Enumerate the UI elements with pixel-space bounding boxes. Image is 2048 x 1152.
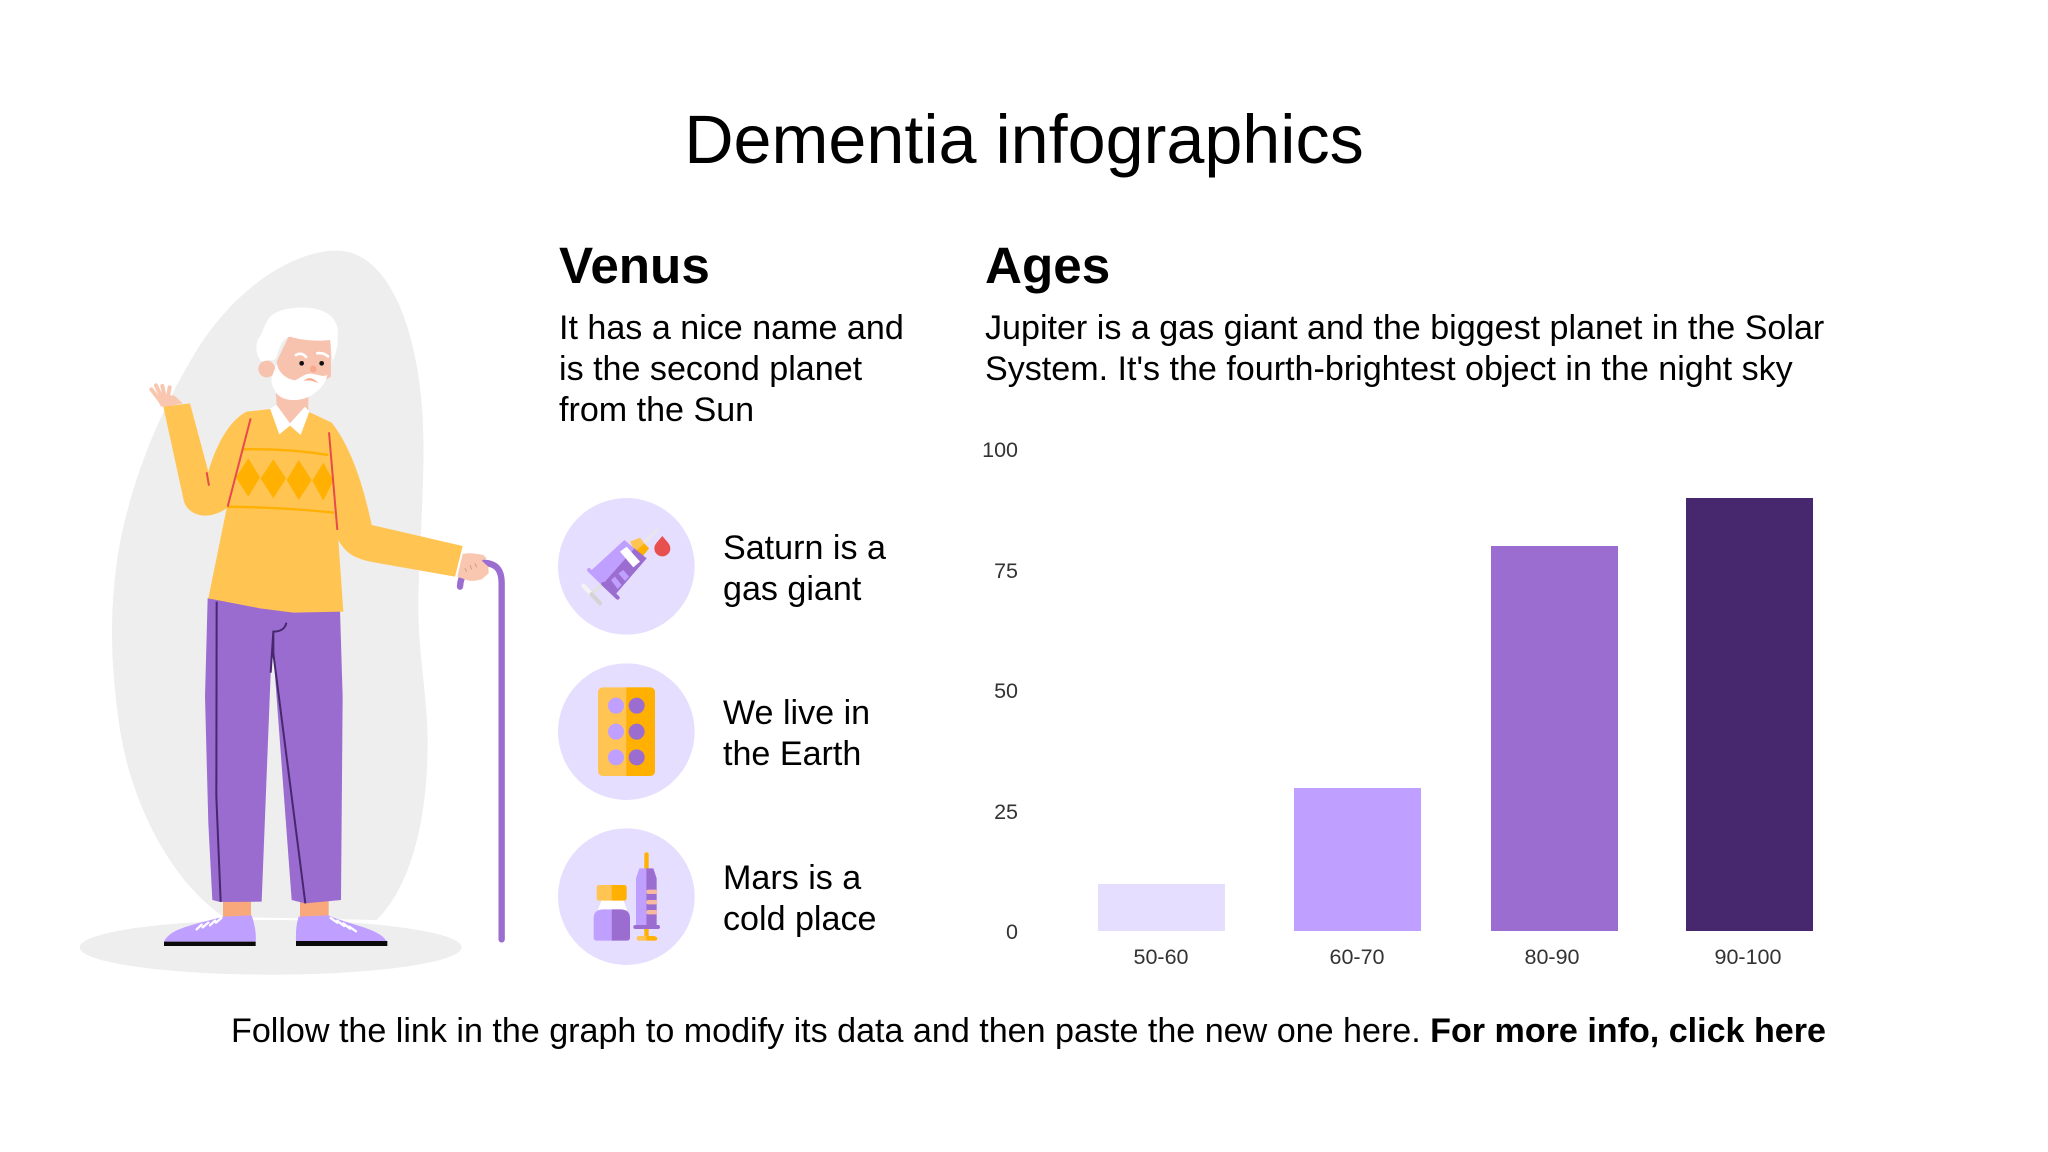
- text: Ages description: [985, 309, 1824, 388]
- icon: syringe and blood drop: [558, 498, 695, 635]
- text: Earth: We live in: [723, 694, 870, 732]
- title: Dementia infographics: [684, 102, 1364, 178]
- face: [277, 335, 331, 392]
- y axis labels: 100: [982, 438, 1018, 462]
- ground shadow: [80, 920, 462, 975]
- trousers: [205, 598, 343, 903]
- x axis labels: 60-70: [1330, 945, 1385, 969]
- nose: [310, 366, 317, 372]
- heading: Ages: Ages: [985, 237, 1110, 294]
- background blob: [112, 251, 428, 920]
- sweater pattern: [207, 418, 337, 530]
- footer note: Follow the link in the graph to modify its data and then paste the new one here. For more info, click here: [231, 1012, 1826, 1050]
- raised hand: [151, 385, 183, 407]
- bar 50-60: [1098, 884, 1225, 931]
- text: Ages description: Jupiter is a gas giant and the biggest planet in the Solar: [985, 309, 1824, 347]
- hair: [256, 307, 338, 362]
- mouth: [303, 378, 318, 383]
- text: Venus description: It has a nice name and: [559, 309, 904, 347]
- bar 60-70: [1294, 788, 1421, 931]
- text: Earth: the Earth: [723, 735, 861, 773]
- bar 80-90: [1491, 546, 1618, 931]
- y axis labels: 50: [994, 679, 1018, 703]
- text: Saturn: [723, 529, 886, 608]
- shoes: [164, 915, 387, 946]
- text: Venus description: [559, 309, 904, 429]
- ear: [258, 361, 275, 377]
- neck: [276, 393, 308, 426]
- text: Mars: cold place: [723, 900, 876, 938]
- text: Mars: Mars is a: [723, 859, 861, 897]
- holding hand: [457, 553, 489, 581]
- text: Ages description: System. It's the fourth-brightest object in the night sky: [985, 350, 1793, 388]
- x axis labels: 90-100: [1715, 945, 1782, 969]
- eyes: [299, 361, 324, 366]
- y axis labels: 75: [994, 559, 1018, 583]
- collar: [270, 405, 309, 435]
- text: Saturn: Saturn is a: [723, 529, 886, 567]
- bar 90-100: [1686, 498, 1813, 931]
- y axis labels: [982, 438, 1018, 944]
- text: Earth: [723, 694, 870, 773]
- heading: Venus: Venus: [559, 237, 710, 294]
- sweater: [163, 403, 463, 613]
- eyebrows: [296, 353, 328, 357]
- cane: [460, 563, 502, 939]
- text: Mars: [723, 859, 876, 938]
- x axis labels: [1134, 945, 1782, 969]
- head, neck and collar: [256, 307, 338, 435]
- x axis labels: 80-90: [1524, 945, 1580, 969]
- icon: vial and syringe: [558, 828, 695, 965]
- text: Saturn: gas giant: [723, 570, 861, 608]
- text: Venus description: is the second planet: [559, 350, 862, 388]
- y axis labels: 0: [1006, 920, 1018, 944]
- icon: pill blister pack: [558, 663, 695, 800]
- socks: [223, 900, 329, 920]
- beard: [271, 364, 327, 400]
- y axis labels: 25: [994, 800, 1018, 824]
- text: Venus description: from the Sun: [559, 391, 754, 429]
- x axis labels: 50-60: [1134, 945, 1189, 969]
